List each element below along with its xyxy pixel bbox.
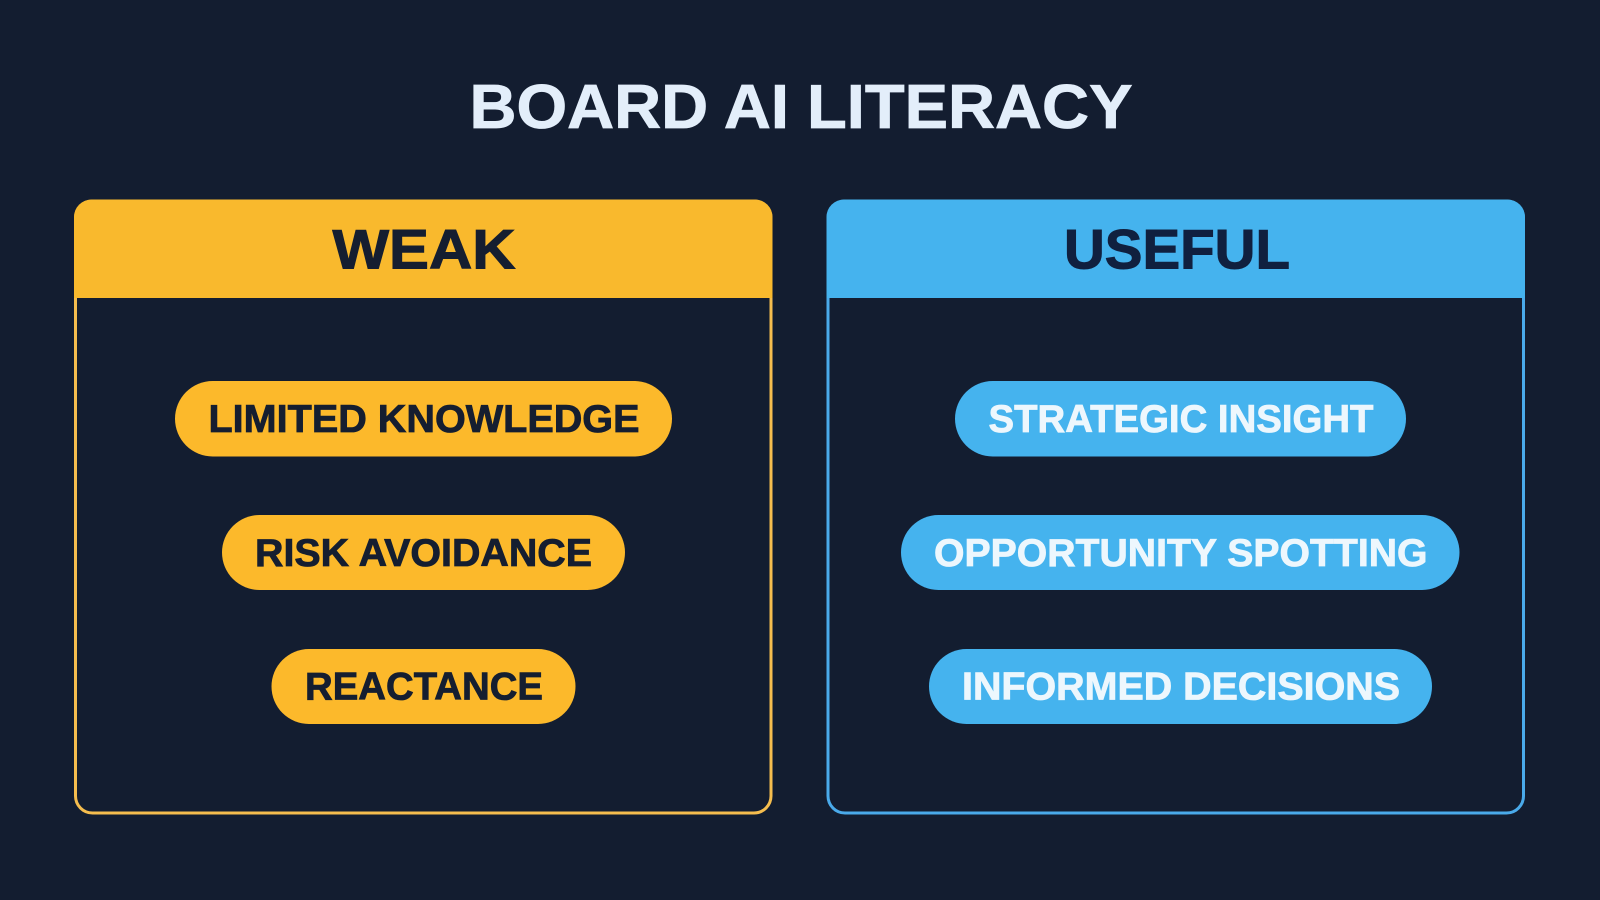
pill: informed decisions: INFORMED DECISIONS [962, 666, 1400, 708]
pill: strategic insight: STRATEGIC INSIGHT [988, 398, 1374, 441]
pill: informed decisions [929, 649, 1432, 724]
panel: useful [826, 200, 1525, 813]
pill: reactance [272, 649, 576, 724]
header: useful [826, 200, 1525, 298]
pill: limited knowledge [175, 381, 672, 456]
pill: opportunity spotting [901, 515, 1460, 590]
header label: useful: USEFUL [1064, 218, 1290, 281]
header label: weak: WEAK [332, 218, 516, 281]
header: weak [74, 200, 772, 298]
panel: weak [74, 200, 772, 813]
pill: limited knowledge: LIMITED KNOWLEDGE [208, 398, 640, 441]
header bar: weak [74, 200, 772, 298]
pill: strategic insight [955, 381, 1406, 456]
pill: opportunity spotting: OPPORTUNITY SPOTTING [934, 532, 1428, 575]
pill: risk avoidance [222, 515, 625, 590]
pill: reactance: REACTANCE [305, 666, 543, 708]
panel outline: useful [828, 201, 1524, 813]
header bar: useful [826, 200, 1525, 298]
title: BOARD AI LITERACY [470, 72, 1132, 142]
pill: risk avoidance: RISK AVOIDANCE [255, 532, 592, 575]
panel outline: weak [76, 201, 771, 813]
